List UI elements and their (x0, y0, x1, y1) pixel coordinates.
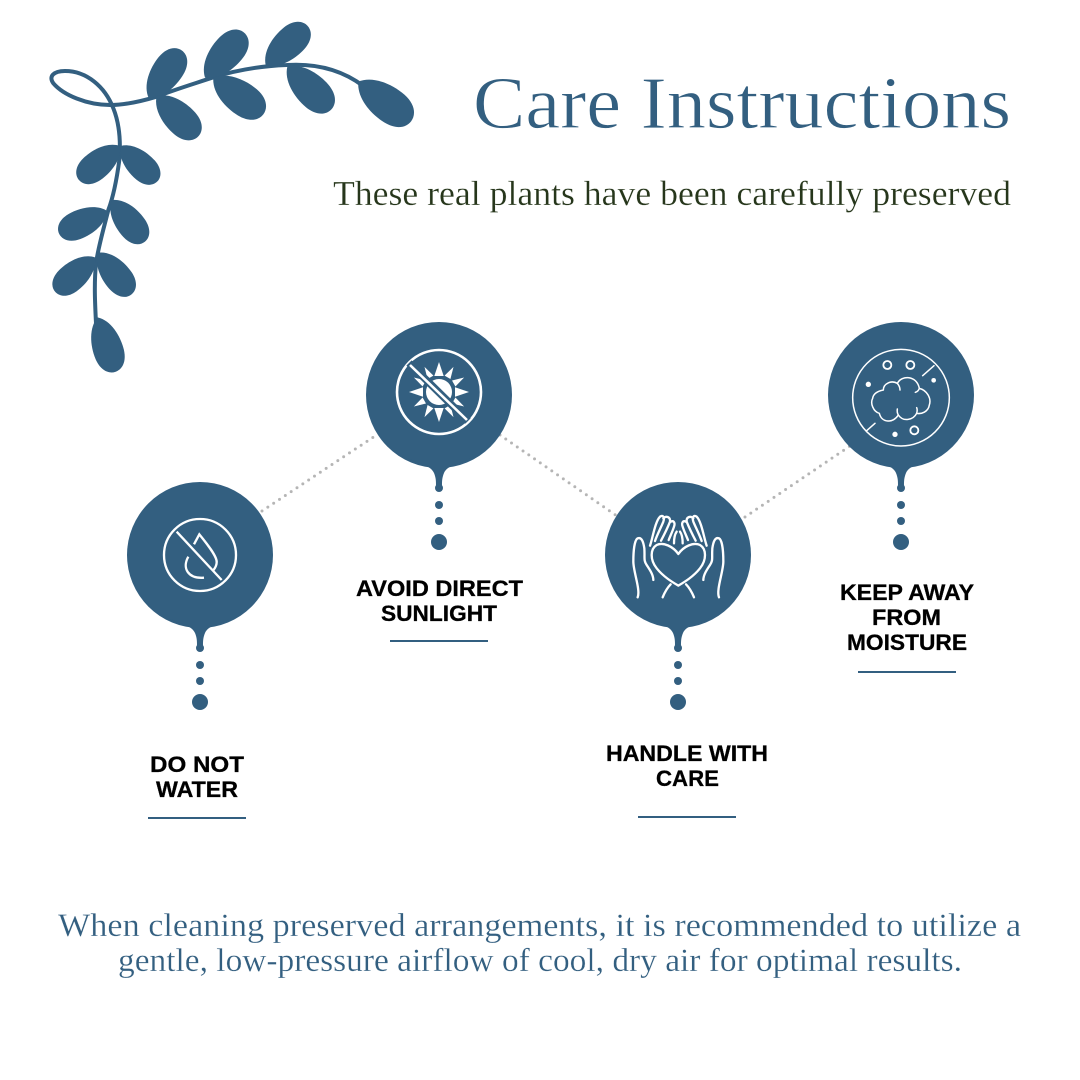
icon: crossed-out water drop (164, 519, 236, 591)
footer note: When cleaning preserved arrangements, it is recommended to utilize a (58, 908, 1021, 944)
icon: leafy vine corner decoration (46, 15, 422, 377)
label: handle with care (606, 741, 768, 818)
teardrop marker with dots (127, 482, 273, 710)
step: handle with care (605, 482, 768, 818)
label: handle with care: CARE (656, 766, 719, 791)
label: keep away from moisture (840, 580, 974, 673)
icon: hands holding heart (633, 516, 723, 597)
subtitle: These real plants have been carefully preserved (333, 174, 1011, 213)
label: keep away from moisture: MOISTURE (847, 630, 967, 655)
label: handle with care: HANDLE WITH (606, 741, 768, 766)
label: do not water: DO NOT (150, 752, 244, 777)
label: avoid direct sunlight (356, 576, 523, 642)
label: avoid direct sunlight: SUNLIGHT (381, 601, 497, 626)
step: avoid direct sunlight (356, 322, 523, 642)
step: keep away from moisture (828, 322, 974, 673)
label: keep away from moisture: FROM (872, 605, 941, 630)
teardrop marker with dots (828, 322, 974, 550)
label: keep away from moisture: KEEP AWAY (840, 580, 974, 605)
label: avoid direct sunlight: AVOID DIRECT (356, 576, 523, 601)
teardrop marker with dots (605, 482, 751, 710)
teardrop marker with dots (366, 322, 512, 550)
icon: mold cloud in circle (853, 349, 949, 446)
label: do not water: WATER (156, 777, 238, 802)
footer note: gentle, low-pressure airflow of cool, dry air for optimal results. (118, 943, 962, 979)
icon: crossed-out sun (397, 350, 481, 434)
footer note (58, 908, 1021, 979)
step: do not water (127, 482, 273, 819)
dotted connector lines (262, 434, 850, 517)
title: Care Instructions (473, 63, 1011, 145)
label: do not water (148, 752, 246, 819)
